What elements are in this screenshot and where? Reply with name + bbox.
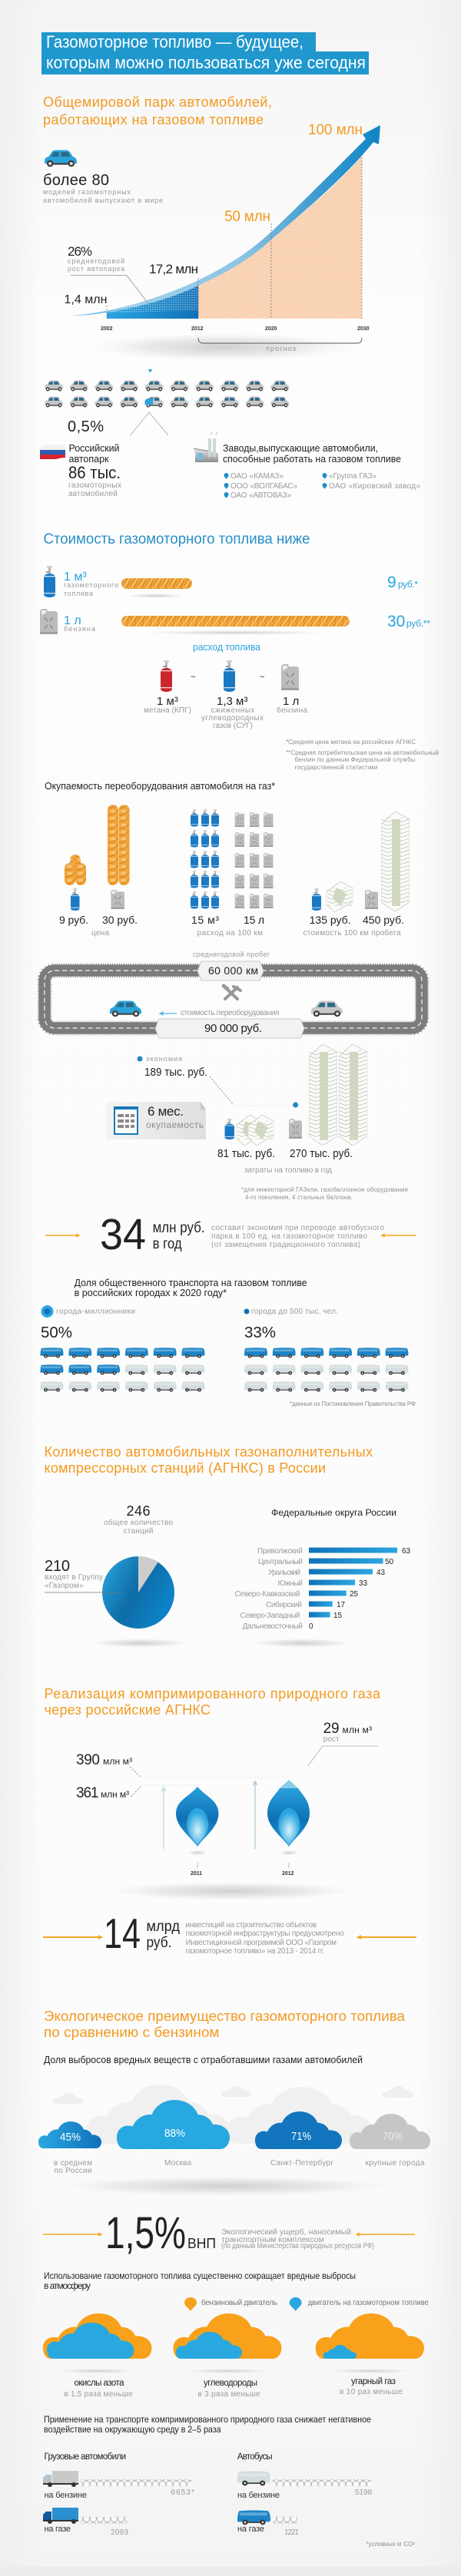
row: petrol price [40,609,430,635]
cloud comparison: hydrocarbons: в 3 раза меньше [198,2390,260,2399]
icon: factory [194,432,218,462]
fuel consumption comparison: 1 м³ [157,695,178,708]
callout: growth 29: рост [323,1735,340,1744]
comparison: price [59,805,138,937]
shadow under clouds [56,2176,394,2196]
heading: payback: Окупаемость переоборудования автомобиля на газ* [45,780,275,792]
road diagram: 60 000 км [208,964,258,977]
list: factories: ОАО «КАМАЗ» [230,472,284,481]
bar chart: federal districts: 15 [333,1612,343,1620]
panel: trucks: Грузовые автомобили [45,2452,126,2462]
stat: russian fleet: автомобилей [68,489,118,498]
text: emissions intro [44,2270,356,2291]
panel: buses: 5198 [355,2488,372,2497]
footnotes: prices: бензин по данным Федеральной службы [295,756,416,763]
car grid: 0.5% share [45,380,289,407]
stat: 14 bln rub: 14 [104,1910,141,1957]
road diagram: среднегодовой пробег [193,951,270,958]
panel: million-plus cities: города-миллионники [56,1308,135,1316]
text: emissions intro: Использование газомоторного топлива существенно сокращает вредные выбросы [44,2270,356,2281]
heading: sales [45,1686,381,1718]
legend: engine types: бензиновый двигатель [201,2298,277,2307]
panel: payback period: 6 мес. [148,1104,184,1119]
stat: 14 bln rub: газомоторное топливо» на 2013 - 2014 гг. [186,1947,324,1956]
bar chart: federal districts: Федеральные округа России [271,1507,396,1518]
bar chart: federal districts: 33 [359,1579,368,1588]
heading: stations: компрессорных станций (АГНКС) в России [45,1460,326,1476]
stat: 34 mln rub: составит экономия при переводе автобусного [211,1223,384,1232]
callout: savings: экономия [146,1055,182,1063]
panel: buses: на газе [237,2525,264,2534]
stat: 14 bln rub: млрд [146,1919,180,1935]
heading: public transport: Доля общественного транспорта на газовом топливе [75,1277,307,1288]
text: negative impact [44,2414,371,2435]
bar chart: federal districts: 50 [385,1558,394,1566]
area chart: fleet growth [65,122,380,352]
heading: sales: Реализация компримированного природного газа [45,1686,381,1701]
annual fuel cost comparison: 81 тыс. руб. [217,1147,275,1160]
callout: 26% growth [68,244,150,306]
stat: 34 mln rub: млн руб. [153,1220,205,1236]
comparison: cost per 100 km [303,812,410,937]
text: factories [223,443,401,465]
label: 361 [76,1785,141,1801]
panel: payback period [106,1102,206,1139]
callout: savings [137,1055,298,1107]
title: Газомоторное топливо — будущее, [46,32,303,51]
footnotes: prices [286,739,439,771]
panel: trucks: на газе [45,2525,71,2534]
panel: buses: 1221 [284,2528,299,2537]
pie chart: stations: 210 [45,1558,70,1575]
fuel consumption comparison: сжиженных [211,706,255,715]
panel: cities up to 500k: 33% [244,1324,276,1341]
bar chart: federal districts: Южный [278,1579,303,1588]
fuel consumption comparison [144,641,307,730]
cloud comparison: carbon monoxide: угарный газ [351,2377,396,2386]
text: negative impact: воздействие на окружающую среду в 2–5 раза [44,2424,221,2435]
comparison: consumption: 15 м³ [191,914,219,926]
stat: more than 80 models: автомобилей выпускают в мире [43,197,163,204]
heading: ecology: по сравнению с бензином [44,2025,220,2040]
area chart: fleet growth: прогноз [266,345,296,352]
stat: 34 mln rub: в год [153,1236,182,1252]
shadow under chart [92,333,353,361]
bar chart: federal districts: 25 [350,1590,359,1599]
row: gas price: газомоторного [64,581,118,589]
list: factories: ООО «ВОЛГАБАС» [230,482,297,491]
fuel consumption comparison: газов (СУГ) [213,722,253,730]
pie chart: stations: станций [123,1527,154,1536]
fuel consumption comparison: расход топлива [193,641,261,653]
panel: trucks: 2093 [111,2528,128,2537]
cloud: large cities [350,2114,430,2168]
area chart: fleet growth: 2020 [265,326,277,332]
legend: engine types: двигатель на газомоторном топливе [308,2299,429,2307]
stat: 34 mln rub: парка в 100 ед. на газомоторное топливо [211,1232,367,1241]
row: petrol price: руб.** [406,618,430,629]
footnote: gazelle: 4-го поколения, 4 стальных баллона. [245,1194,353,1201]
comparison: consumption [191,809,274,937]
stat: russian fleet [68,443,121,498]
icon: blue car [45,150,77,167]
area chart: fleet growth: 100 млн [308,122,363,138]
bar chart: federal districts: 63 [402,1547,411,1556]
bar chart: federal districts: Приволжский [257,1547,303,1556]
row: gas price: 1 м³ [64,570,87,584]
heading: ecology: Экологическое преимущество газомоторного топлива [44,2009,406,2024]
flame chart: 2011 [141,1785,218,1877]
cloud: Saint Petersburg: Санкт-Петербург [270,2158,333,2168]
stat: 34 mln rub [45,1210,416,1259]
row: petrol price: 30 [387,613,405,630]
list: factories: ОАО «АВТОВАЗ» [230,491,291,500]
stat: 1.5% GNP [43,2208,415,2258]
pie chart: stations: общее количество [104,1518,173,1527]
fuel consumption comparison: ~ [191,673,195,682]
comparison: cost per 100 km: стоимость 100 км пробега [303,928,401,937]
panel: buses: на бензине [237,2491,280,2500]
panel: cities up to 500k: города до 500 тыс. чел. [251,1308,338,1316]
stat: 0.5% [68,412,168,435]
heading: world fleet: работающих на газовом топливе [43,112,264,127]
stat: russian fleet: Российский [69,443,120,454]
row: gas price: топлива [64,590,93,597]
cloud comparison: nitrogen oxides: в 1,5 раза меньше [65,2390,133,2399]
footnote: government decree: *данные из Постановления Правительства РФ [290,1400,416,1407]
cloud: large cities: 70% [383,2130,403,2143]
fuel consumption comparison: углеводородных [201,714,264,723]
area chart: fleet growth: 17,2 млн [149,262,198,276]
fuel consumption comparison: бензина [277,706,307,715]
stat: 34 mln rub: 34 [100,1210,146,1259]
pie chart: stations: входят в Группу [45,1573,103,1582]
stat: 14 bln rub: Инвестиционной программой ООО «Газпром [186,1939,337,1947]
label: 361: млн м³ [101,1789,129,1800]
fuel consumption comparison: 1 л [283,695,299,708]
stat: 1.5% GNP: (по данным Министерства природных ресурсов РФ) [221,2242,374,2250]
panel: trucks [43,2452,194,2537]
list: factories [224,472,420,500]
cloud: average Russia: 45% [60,2131,81,2144]
heading: world fleet [43,94,272,127]
list: factories: ОАО «Кировский завод» [329,482,420,491]
subheading: emissions share: Доля выбросов вредных веществ с отработавшими газами автомобилей [44,2054,363,2065]
area chart: fleet growth: 2002 [101,326,113,332]
callout: 26% growth: среднегодовой [68,257,124,265]
cloud comparison: carbon monoxide: в 10 раз меньше [340,2388,403,2396]
bar chart: federal districts: Центральный [258,1558,303,1566]
bar chart: federal districts: Уральский [268,1569,300,1577]
panel: cities up to 500k [244,1308,409,1392]
footnotes: prices: **Средняя потребительская цена на автомобильный [286,749,439,756]
comparison: price: цена [91,929,109,937]
fuel consumption comparison: ~ [260,673,264,682]
footnote: gazelle [241,1186,409,1201]
cloud: large cities: крупные города [366,2159,425,2168]
cloud: Moscow: Москва [164,2159,191,2168]
flame chart: 2012 [141,1777,310,1877]
stat: 14 bln rub: газомоторной инфраструктуры предусмотрено [186,1929,344,1938]
stat: russian fleet: 86 тыс. [68,463,121,482]
bar chart: federal districts: Северо-Западный [240,1612,300,1620]
annual fuel cost comparison [217,1044,367,1175]
heading: ecology [44,2009,406,2040]
title [41,32,369,74]
cloud comparison: hydrocarbons: углеводороды [204,2379,257,2388]
stat: 1.5% GNP: 1,5% [105,2208,186,2258]
panel: buses [237,2452,372,2537]
footnote: CO2: *условных кг CO² [366,2541,415,2548]
callout: growth 29: млн м³ [343,1724,372,1735]
road diagram [45,951,422,1038]
text: emissions intro: в атмосферу [44,2280,91,2291]
label: 390: 390 [76,1752,100,1768]
flame chart: 2012: 2012 [282,1871,294,1877]
stat: 1.5% GNP: транспортным комплексом [221,2236,324,2244]
bar chart: federal districts: Северо-Кавказский [235,1590,300,1599]
fuel consumption comparison: 1,3 м³ [217,695,247,708]
panel: payback period: окупаемость [146,1119,204,1130]
comparison: consumption: расход на 100 км [197,929,263,937]
icon: russian flag [40,445,65,459]
annual fuel cost comparison: 270 тыс. руб. [290,1147,353,1160]
cloud: average Russia: в среднем [54,2159,92,2168]
annual fuel cost comparison: затраты на топливо в год [244,1166,332,1175]
bar chart: federal districts: 17 [337,1601,346,1609]
panel: million-plus cities [40,1305,204,1392]
bar chart: federal districts: 0 [309,1622,313,1631]
shadow under flames [106,1882,358,1900]
pie chart: stations [45,1503,191,1648]
road diagram: 90 000 руб. [204,1022,262,1035]
title: которым можно пользоваться уже сегодня [46,53,366,72]
stat: 0.5%: 0,5% [68,418,104,435]
panel: buses: Автобусы [237,2452,273,2462]
cloud: Moscow [117,2100,230,2168]
text: factories: Заводы,выпускающие автомобили, [223,443,378,454]
footnote: gazelle: *для инжекторной ГАЗели, газобаллонное оборудование [241,1186,409,1193]
stat: 1.5% GNP: Экологический ущерб, наносимый [221,2227,351,2237]
cloud comparison: nitrogen oxides: окислы азота [74,2379,124,2388]
bar chart: federal districts: Сибирский [266,1600,302,1609]
footnotes: prices: *Средняя цена метана на российских АГНКС [286,739,416,746]
heading: world fleet: Общемировой парк автомобилей, [43,94,272,110]
cloud: Saint Petersburg: 71% [291,2130,311,2143]
label: 361: 361 [76,1785,98,1801]
list: factories: «Группа ГАЗ» [329,472,376,481]
panel: trucks: на бензине [45,2491,87,2500]
label: 390 [76,1752,141,1777]
cloud comparison: carbon monoxide [316,2313,424,2396]
footnotes: prices: государственной статистики [295,764,378,771]
icon: hammer and wrench [224,986,240,999]
callout: growth 29 [308,1721,378,1766]
pie chart: stations: «Газпром» [45,1582,84,1590]
bar chart: federal districts [235,1507,411,1648]
heading: cost: Стоимость газомоторного топлива ниже [43,531,310,547]
cloud: average Russia [38,2121,101,2175]
legend: engine types [184,2297,429,2311]
row: gas price [44,566,418,598]
icon: blue car on road [110,1000,141,1017]
cloud: Saint Petersburg [255,2111,342,2168]
row: gas price: руб.* [398,579,418,590]
bar chart: federal districts: Дальневосточный [243,1622,303,1631]
label: 390: млн м³ [103,1756,132,1767]
pie chart: stations: 246 [126,1503,151,1519]
area chart: fleet growth: 2030 [357,326,370,332]
icon: grey car on road [311,1000,343,1017]
callout: growth 29: 29 [323,1721,340,1737]
stat: 34 mln rub: (от замещения традиционного топлива) [211,1241,360,1249]
cloud comparison: nitrogen oxides [43,2313,152,2399]
heading: stations: Количество автомобильных газонаполнительных [45,1444,373,1460]
stat: russian fleet: автопарк [69,454,109,465]
panel: million-plus cities: 50% [41,1324,72,1341]
stat: 1.5% GNP: ВНП [187,2236,216,2251]
callout: 26% growth: 26% [68,244,92,259]
panel: trucks: 6653* [171,2488,194,2497]
stat: 14 bln rub: инвестиций на строительство объектов [186,1920,317,1930]
area chart: fleet growth: 2012 [191,326,204,332]
heading: sales: через российские АГНКС [45,1702,211,1718]
text: negative impact: Применение на транспорте компримированного природного газа снижает негативное [44,2414,371,2425]
flame chart: 2011: 2011 [191,1871,202,1877]
fuel consumption comparison: метана (КПГ) [144,706,191,715]
row: petrol price: бензина [64,625,95,633]
area chart: fleet growth: 50 млн [224,209,270,225]
comparison: price: 9 руб. [59,914,88,926]
callout: 26% growth: рост автопарка [68,265,124,273]
cloud comparison: hydrocarbons [174,2313,281,2399]
text: factories: способные работать на газовом топливе [223,454,401,465]
row: gas price: 9 [387,574,396,591]
bar chart: federal districts: 43 [376,1569,386,1577]
heading: public transport: в российских городах к 2020 году* [75,1287,227,1298]
cloud: Moscow: 88% [164,2127,185,2140]
row: petrol price: 1 л [64,614,81,627]
stat: russian fleet: газомоторных [68,481,121,490]
stat: more than 80 models: более 80 [43,172,109,189]
comparison: consumption: 15 л [244,914,264,926]
comparison: price: 30 руб. [102,914,138,926]
comparison: cost per 100 km: 135 руб. [310,914,351,926]
stat: 14 bln rub [43,1910,416,1957]
stat: 14 bln rub: руб. [146,1935,172,1951]
stat: more than 80 models: моделей газомоторных [43,188,131,196]
area chart: fleet growth: 1,4 млн [65,293,108,306]
stat: more than 80 models [43,172,163,204]
heading: public transport [75,1277,307,1298]
cloud: average Russia: по России [54,2167,92,2175]
comparison: cost per 100 km: 450 руб. [363,914,404,926]
background clouds [53,2085,413,2144]
callout: savings: 189 тыс. руб. [144,1066,207,1079]
heading: stations [45,1444,373,1476]
marker triangle [148,369,152,373]
label: conversion cost: стоимость переоборудования [181,1008,280,1017]
